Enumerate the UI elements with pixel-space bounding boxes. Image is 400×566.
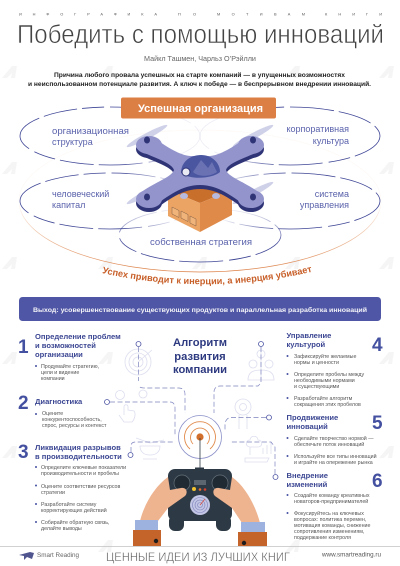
- step 4: [286, 331, 383, 408]
- ellipse labels: управления: [300, 200, 349, 210]
- step 5: обеспечьте поток инноваций: [294, 441, 364, 448]
- connector nodes: [104, 342, 278, 480]
- step 4: Зафиксируйте желаемые: [294, 353, 356, 360]
- step 3: 3: [18, 442, 29, 463]
- step 4: культурой: [286, 340, 326, 349]
- step 3: корректирующих действий: [41, 507, 107, 514]
- ellipse labels: [52, 124, 349, 247]
- ellipse labels: человеческий: [52, 189, 109, 199]
- icon: drone with parcel: [125, 123, 275, 232]
- icon: right hand: [213, 477, 267, 546]
- algorithm title: [173, 337, 227, 376]
- step 3: в производительности: [35, 452, 122, 461]
- heading box: successful organization: Успешная организация: [138, 103, 263, 115]
- step 3: Собирайте обратную связь,: [41, 519, 110, 526]
- header caption: ИНФОГРАФИКА: [19, 12, 157, 16]
- icon: left hand: [133, 477, 187, 546]
- step 6: мотивация команды, снижение: [294, 523, 370, 529]
- step 3: Ликвидация разрывов: [35, 443, 121, 452]
- title: Победить с помощью инноваций: [17, 21, 384, 49]
- header caption: КНИГИ: [325, 12, 382, 16]
- step 5: Сделайте творчество нормой —: [294, 435, 374, 442]
- header caption: МОТИВАМ: [217, 12, 305, 16]
- intro text: и неиспользованном потенциале развития. А ключ к победе — в беспрерывном внедрении инноваций.: [28, 80, 371, 88]
- curved warning: Успех приводит к инерции, а инерция убивает: [102, 266, 312, 286]
- step 1: и возможностей: [35, 341, 96, 350]
- footer: Smart Reading: [37, 552, 79, 559]
- step 4: нормы и ценности: [294, 360, 339, 366]
- step 6: сопротивления изменениям,: [294, 529, 364, 535]
- step 3: Разработайте систему: [41, 501, 97, 508]
- footer: www.smartreading.ru: [321, 552, 381, 558]
- step 1: компании: [41, 376, 65, 382]
- header caption: ПО: [178, 12, 196, 16]
- step 6: Создайте команду креативных: [294, 492, 370, 499]
- intro text: Причина любого провала успешных на старте компаний — в упущенных возможностях: [54, 71, 345, 79]
- step 4: необходимыми нормами: [294, 378, 355, 384]
- step 4: сокращения этих пробелов: [294, 402, 361, 408]
- header caption: [19, 12, 382, 16]
- propellers: [125, 123, 275, 206]
- step 2: [18, 393, 107, 429]
- step 6: Внедрение: [286, 471, 328, 480]
- ellipse labels: капитал: [52, 200, 85, 210]
- ellipse labels: культура: [313, 136, 349, 146]
- step 3: [18, 442, 126, 532]
- step 5: и играйте на опережение рынка: [294, 459, 373, 466]
- step 6: поддержание контроля: [294, 535, 351, 541]
- step 1: организации: [35, 350, 83, 359]
- step 5: инноваций: [286, 422, 328, 431]
- ellipse labels: собственная стратегия: [150, 237, 252, 247]
- step 4: 4: [372, 335, 383, 356]
- diagram ellipses: [19, 107, 381, 272]
- footer: ЦЕННЫЕ ИДЕИ ИЗ ЛУЧШИХ КНИГ: [106, 552, 291, 564]
- banner: [19, 297, 381, 321]
- step 1: [18, 332, 121, 382]
- step 4: Определите пробелы между: [294, 372, 364, 378]
- algorithm title: компании: [173, 364, 227, 376]
- landing skids: [180, 193, 220, 199]
- logo: [19, 552, 34, 560]
- step 2: Оцените: [42, 411, 63, 417]
- step 3: производительности и пробелы: [41, 471, 119, 477]
- faint process icons: [116, 345, 274, 462]
- step 5: [286, 413, 383, 466]
- ellipse labels: организационная: [52, 126, 129, 136]
- icon: signal rings: [178, 416, 222, 469]
- ellipse labels: система: [315, 189, 349, 199]
- heading box: successful organization: [121, 98, 276, 118]
- drone dome: [181, 155, 220, 178]
- step 2: Диагностика: [35, 397, 83, 406]
- step 5: Продвижение: [286, 413, 338, 422]
- step 3: стратегии: [41, 490, 65, 496]
- camera: [182, 168, 190, 176]
- step 5: 5: [372, 413, 383, 434]
- icon: remote controller: [168, 468, 232, 531]
- step 1: Продумайте стратегию,: [41, 363, 99, 370]
- step 4: Управление: [286, 331, 331, 340]
- step 6: новаторов-предпринимателей: [294, 498, 368, 505]
- parcel box: [168, 175, 232, 232]
- intro text: [28, 71, 371, 88]
- ellipse labels: корпоративная: [286, 124, 349, 134]
- drone body: [136, 136, 264, 212]
- motors: [144, 136, 256, 200]
- step 4: и существующими: [294, 384, 339, 390]
- ellipse labels: структура: [52, 137, 93, 147]
- step 6: [286, 471, 383, 541]
- step 3: делайте выводы: [41, 525, 82, 532]
- step 6: изменений: [286, 480, 328, 489]
- step 1: 1: [18, 337, 29, 358]
- authors: Майкл Ташмен, Чарльз О’Рэйлли: [144, 54, 256, 63]
- step 2: 2: [18, 393, 29, 414]
- step 4: Разработайте алгоритм: [294, 395, 353, 402]
- step 6: Фокусируйтесь на ключевых: [294, 510, 364, 517]
- banner: Выход: усовершенствование существующих продуктов и параллельная разработка инноваций: [33, 306, 367, 314]
- step 2: конкурентоспособность,: [42, 417, 102, 423]
- step 5: Используйте все типы инноваций: [294, 453, 377, 460]
- algorithm title: развития: [174, 351, 226, 363]
- dashed connectors: [110, 347, 275, 474]
- step 1: Определение проблем: [35, 332, 121, 341]
- step 3: Определите ключевые показатели: [41, 465, 126, 471]
- algorithm title: Алгоритм: [173, 337, 227, 349]
- step 2: спрос, ресурсы и контекст: [42, 423, 107, 429]
- step 1: цели и видение: [41, 370, 79, 376]
- footer: [0, 546, 400, 564]
- step 6: вопросах: политика перемен,: [294, 517, 366, 523]
- step 3: Оцените соответствие ресурсов: [41, 484, 121, 490]
- step 6: 6: [372, 471, 383, 492]
